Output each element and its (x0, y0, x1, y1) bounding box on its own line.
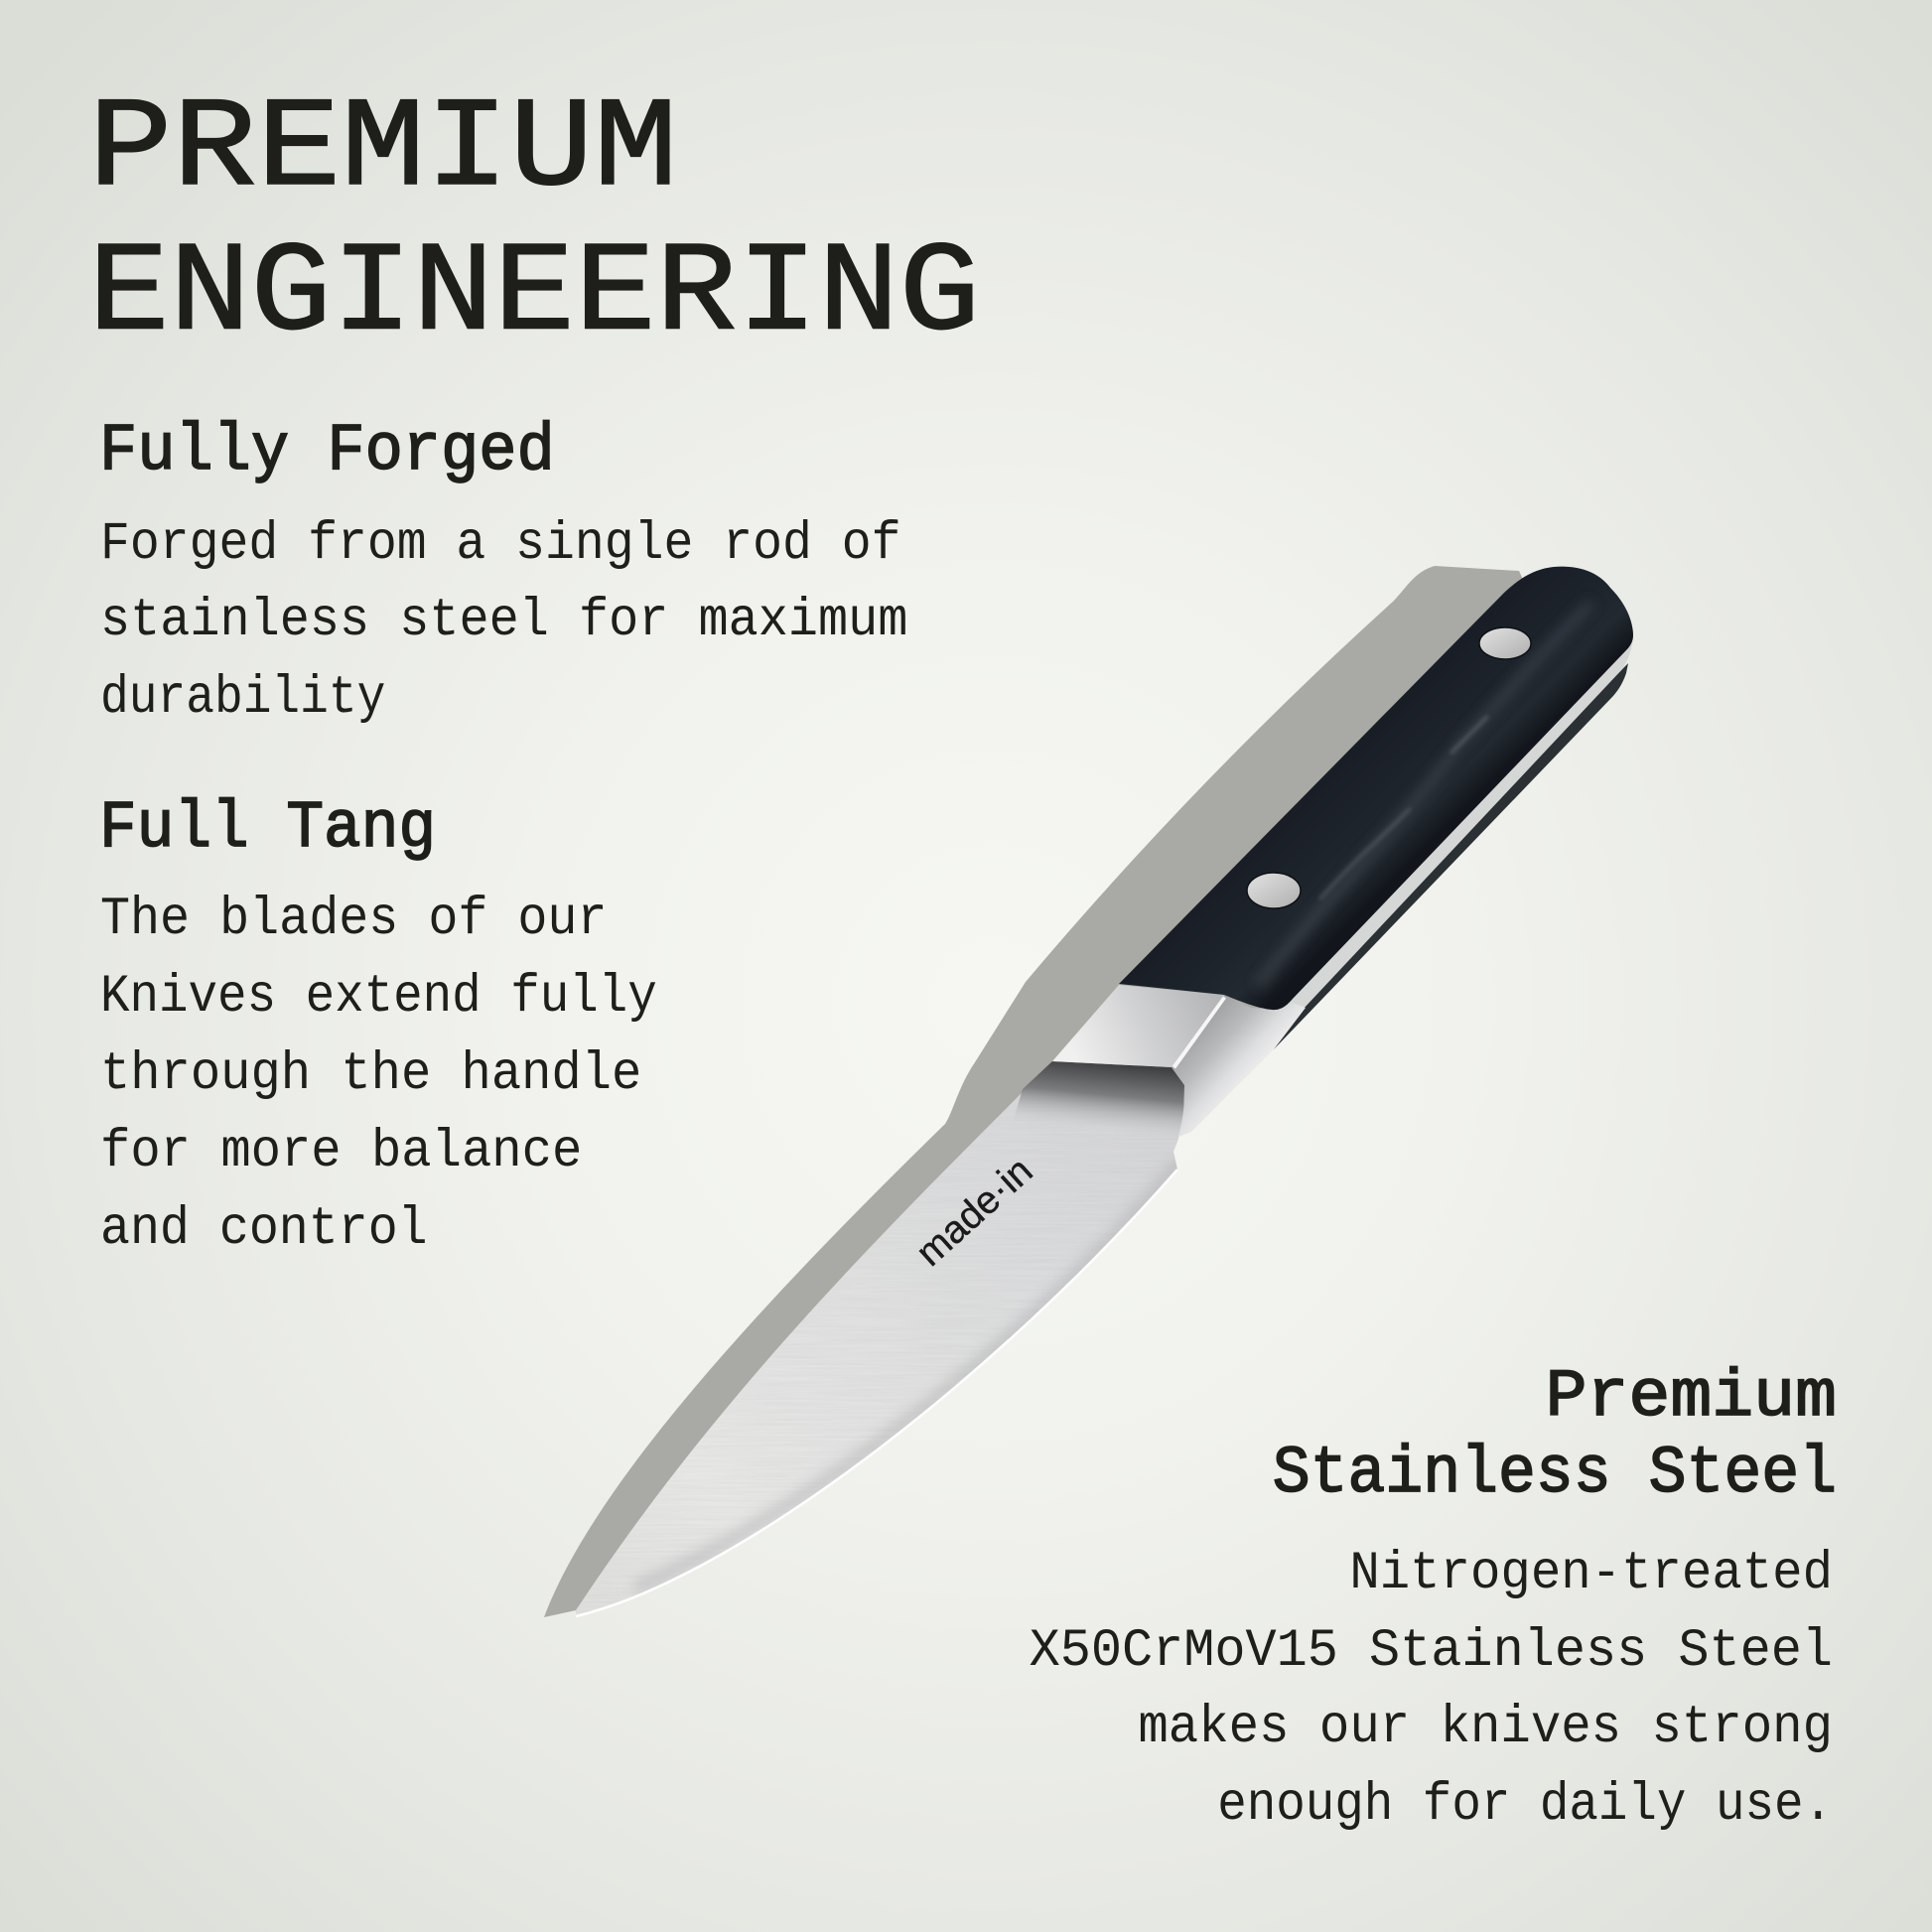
text block: full tang description: through the handle (100, 1043, 641, 1105)
text block: fully forged description (100, 513, 907, 729)
knife bolster side (1172, 995, 1306, 1137)
text block: full tang description: and control (100, 1198, 428, 1260)
section: premium stainless steel (1030, 1359, 1837, 1836)
text block: stainless steel description: makes our knives strong (1138, 1697, 1833, 1757)
heading: fully forged: Fully Forged (99, 413, 555, 489)
text block: stainless steel description: X50CrMoV15 Stainless Steel (1030, 1620, 1833, 1681)
text block: full tang description (100, 889, 657, 1260)
knife blade (576, 1061, 1184, 1616)
section: fully forged (99, 413, 907, 729)
text block: full tang description: for more balance (100, 1121, 582, 1182)
knife rivet: lower (1247, 873, 1301, 908)
knife blade brushed texture (629, 1160, 1177, 1594)
knife blade heel shading (1013, 1061, 1184, 1142)
text block: fully forged description: durability (100, 669, 385, 729)
knife handle (1119, 567, 1633, 1010)
knife rivet: upper (1479, 627, 1531, 659)
title: PREMIUM (88, 78, 678, 222)
text block: stainless steel description (1030, 1543, 1833, 1836)
text block: full tang description: Knives extend fully (100, 966, 657, 1028)
knife handle wear marks (1261, 606, 1588, 983)
knife lower handle scale (1274, 663, 1628, 1049)
text block: fully forged description: Forged from a single rod of (100, 513, 900, 575)
knife bolster top (1052, 985, 1224, 1067)
heading: premium stainless steel: Premium (1546, 1359, 1837, 1436)
heading: full tang: Full Tang (99, 790, 436, 867)
knife illustration (544, 566, 1633, 1638)
text block: stainless steel description: Nitrogen-treated (1349, 1543, 1833, 1603)
knife blade cutting edge highlight (576, 1170, 1177, 1616)
text block: stainless steel description: enough for daily use. (1217, 1774, 1833, 1836)
text block: fully forged description: stainless steel for maximum (100, 590, 907, 651)
section: full tang (99, 790, 657, 1260)
title (88, 78, 980, 366)
title: ENGINEERING (88, 222, 980, 366)
knife shadow (544, 566, 1549, 1617)
knife steel tang strip (1261, 635, 1633, 1042)
heading: premium stainless steel: Stainless Steel (1273, 1436, 1837, 1512)
heading: premium stainless steel (1273, 1359, 1837, 1512)
text block: full tang description: The blades of our (100, 889, 607, 950)
knife bolster highlight (1173, 997, 1224, 1067)
knife blade logo: made·in (908, 1150, 1040, 1275)
